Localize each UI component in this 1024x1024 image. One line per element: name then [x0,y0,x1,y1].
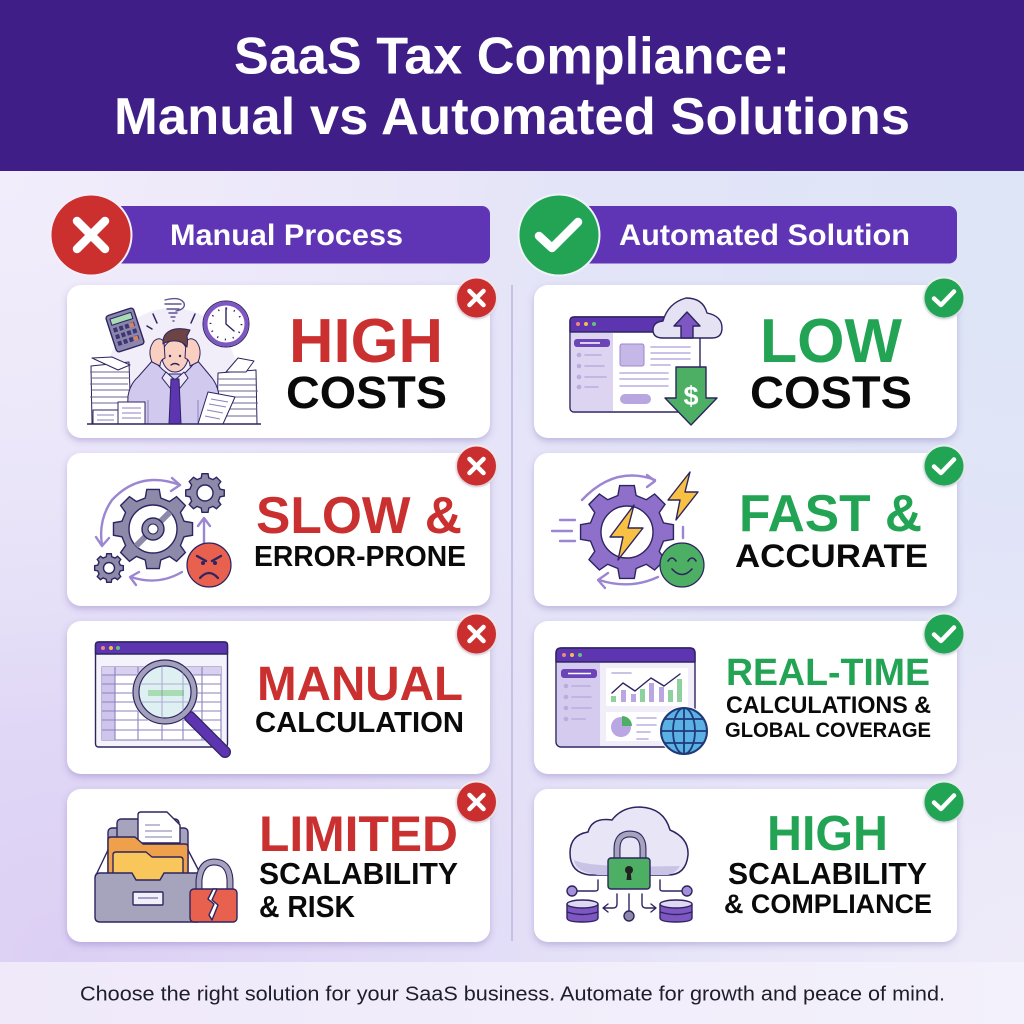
badge: cross [455,612,498,656]
heading: LIMITED SCALABILITY & RISK: SCALABILITY [259,856,458,891]
heading: REAL-TIME CALCULATIONS & GLOBAL COVERAGE: REAL-TIME [726,652,930,694]
title banner: Manual vs Automated Solutions [114,88,910,146]
icon: lightning gear with happy face [552,472,704,588]
heading: REAL-TIME CALCULATIONS & GLOBAL COVERAGE [725,652,931,742]
heading: FAST & ACCURATE [735,485,928,574]
card: limited scalability and risk [67,780,498,942]
icon: secure cloud with databases [567,807,692,922]
heading: HIGH COSTS [286,307,447,418]
heading: LOW COSTS [750,307,912,418]
badge: check [922,276,966,320]
heading: SLOW & ERROR-PRONE [254,487,466,573]
heading: FAST & ACCURATE: ACCURATE [735,538,928,574]
icon: stressed worker with paperwork [87,299,261,424]
icon: file drawer with broken lock [95,812,237,922]
icon: dashboard with globe [556,648,709,756]
heading: SLOW & ERROR-PRONE: ERROR-PRONE [254,541,466,573]
card: fast and accurate [534,444,966,606]
card: real-time calculations and global coverage [534,612,966,774]
badge: cross [455,444,498,488]
heading: MANUAL CALCULATION: CALCULATION [255,707,464,739]
column header: Manual Process [50,194,490,276]
card: high scalability and compliance [534,780,966,942]
badge: check [922,444,966,488]
heading: SLOW & ERROR-PRONE: SLOW & [256,487,462,545]
heading: LOW COSTS: COSTS [750,367,912,418]
heading: HIGH SCALABILITY & COMPLIANCE: & COMPLIANCE [724,889,932,919]
badge: check [922,780,966,824]
column header: Automated Solution: Automated Solution [619,219,910,252]
heading: LIMITED SCALABILITY & RISK: LIMITED [259,806,458,862]
title banner: SaaS Tax Compliance: [234,28,790,86]
heading: HIGH SCALABILITY & COMPLIANCE: HIGH [767,807,888,861]
heading: REAL-TIME CALCULATIONS & GLOBAL COVERAGE: CALCULATIONS & [726,692,931,719]
heading: FAST & ACCURATE: FAST & [739,485,922,543]
icon: gears with angry face [95,474,231,587]
footer strip [0,962,1024,1024]
heading: HIGH COSTS: COSTS [286,367,447,418]
column header: Automated Solution [518,194,957,276]
icon: cloud app with falling cost arrow [570,298,722,425]
badge: cross [455,276,498,320]
badge: cross [455,780,498,824]
card: low costs [534,276,966,438]
column header: Manual Process: Manual Process [170,219,403,252]
icon: spreadsheet under magnifier [96,642,228,752]
title banner [0,0,1024,171]
card: high costs [67,276,498,438]
icon: cloud app with falling cost arrow: $ [683,381,699,411]
heading: MANUAL CALCULATION [255,658,464,739]
heading: LIMITED SCALABILITY & RISK: & RISK [259,889,356,924]
heading: LOW COSTS: LOW [760,307,902,376]
footer strip: Choose the right solution for your SaaS business. Automate for growth and peace of mind. [80,984,945,1006]
heading: HIGH COSTS: HIGH [289,307,443,376]
heading: MANUAL CALCULATION: MANUAL [257,658,463,711]
heading: LIMITED SCALABILITY & RISK [259,806,458,924]
card: manual calculation [67,612,498,774]
heading: HIGH SCALABILITY & COMPLIANCE: SCALABILITY [728,856,927,891]
heading: REAL-TIME CALCULATIONS & GLOBAL COVERAGE: GLOBAL COVERAGE [725,719,931,742]
badge: check [922,612,966,656]
heading: HIGH SCALABILITY & COMPLIANCE [724,807,932,919]
card: slow and error-prone [67,444,498,606]
